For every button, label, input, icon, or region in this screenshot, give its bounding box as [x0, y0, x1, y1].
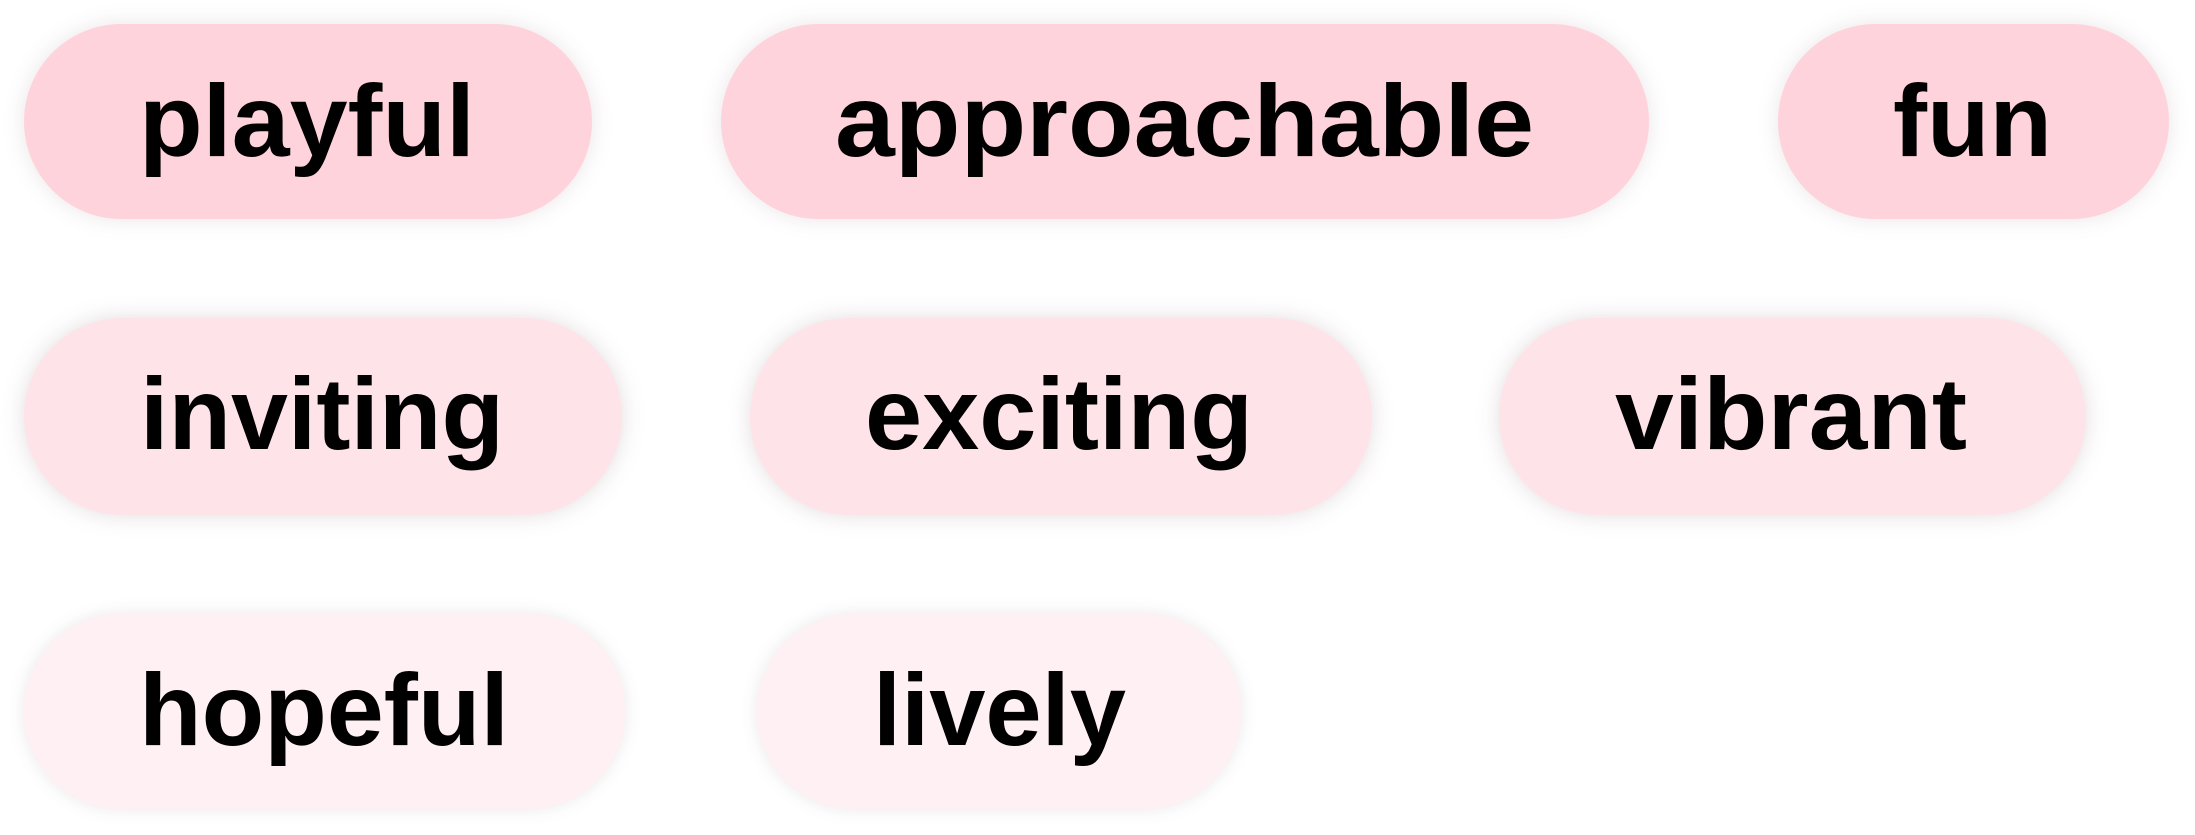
pill: inviting	[24, 318, 622, 515]
pill: vibrant	[1499, 318, 2086, 515]
pill: playful	[24, 24, 592, 219]
pill: fun	[1778, 24, 2169, 219]
pill: approachable: approachable	[835, 64, 1534, 178]
pill: inviting: inviting	[140, 357, 504, 471]
pill: exciting	[750, 318, 1372, 515]
pill: fun: fun	[1893, 64, 2052, 178]
pill: vibrant: vibrant	[1615, 357, 1967, 471]
pill: exciting: exciting	[865, 357, 1253, 471]
pill: hopeful	[24, 614, 625, 809]
pill: lively	[757, 614, 1241, 809]
pill: approachable	[721, 24, 1649, 219]
pill: lively: lively	[873, 653, 1126, 767]
pill: hopeful: hopeful	[139, 653, 509, 767]
pill: playful: playful	[139, 64, 475, 178]
